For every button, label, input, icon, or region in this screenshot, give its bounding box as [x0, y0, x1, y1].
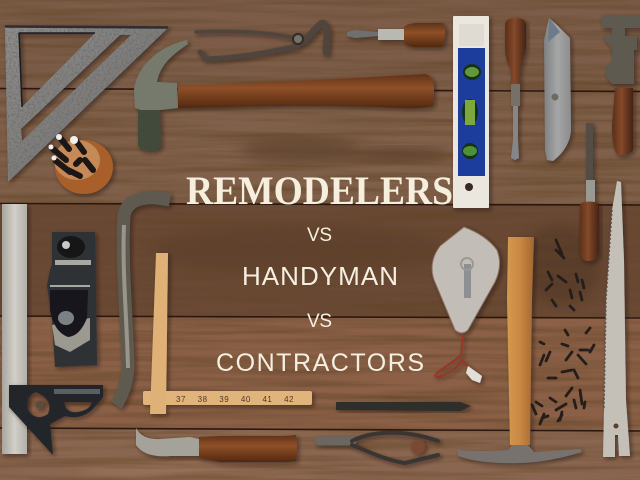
- heading: CONTRACTORS: CONTRACTORS: [216, 349, 424, 377]
- icon: needle-nose pliers: [319, 433, 438, 463]
- icon: drill bit holder: [48, 134, 113, 194]
- icon: combination square: [9, 385, 103, 455]
- title: REMODELERS: REMODELERS: [186, 168, 453, 213]
- text: vs: VS: [307, 225, 332, 246]
- icon: hook knife: [136, 428, 297, 462]
- icon: pry bar: [116, 198, 170, 405]
- icon: flathead screwdriver: [505, 18, 526, 160]
- icon: steel ruler: [2, 204, 27, 454]
- icon: hand plane: [47, 232, 97, 367]
- icon: stubby screwdriver: [347, 23, 445, 47]
- icon: adjustable wrench: [601, 15, 640, 155]
- icon: pincers: [196, 23, 327, 59]
- icon: hand saw: [603, 181, 630, 457]
- icon: torpedo level: [453, 16, 489, 208]
- icon: drill bit: [336, 402, 471, 411]
- icon: utility knife: [544, 18, 571, 161]
- icon: speed square: [5, 26, 168, 182]
- icon: small screwdriver: [579, 123, 599, 261]
- icon: folding ruler: [143, 253, 312, 414]
- text: vs second: VS: [307, 311, 332, 332]
- heading: HANDYMAN: HANDYMAN: [242, 261, 398, 291]
- nails and tacks: [532, 240, 594, 424]
- icon: tack hammer: [458, 237, 582, 463]
- icon: chalk line reel: [432, 227, 500, 383]
- ruler numbers: 37 38 39 40 41 42: [176, 395, 294, 404]
- icon: claw hammer: [134, 40, 434, 151]
